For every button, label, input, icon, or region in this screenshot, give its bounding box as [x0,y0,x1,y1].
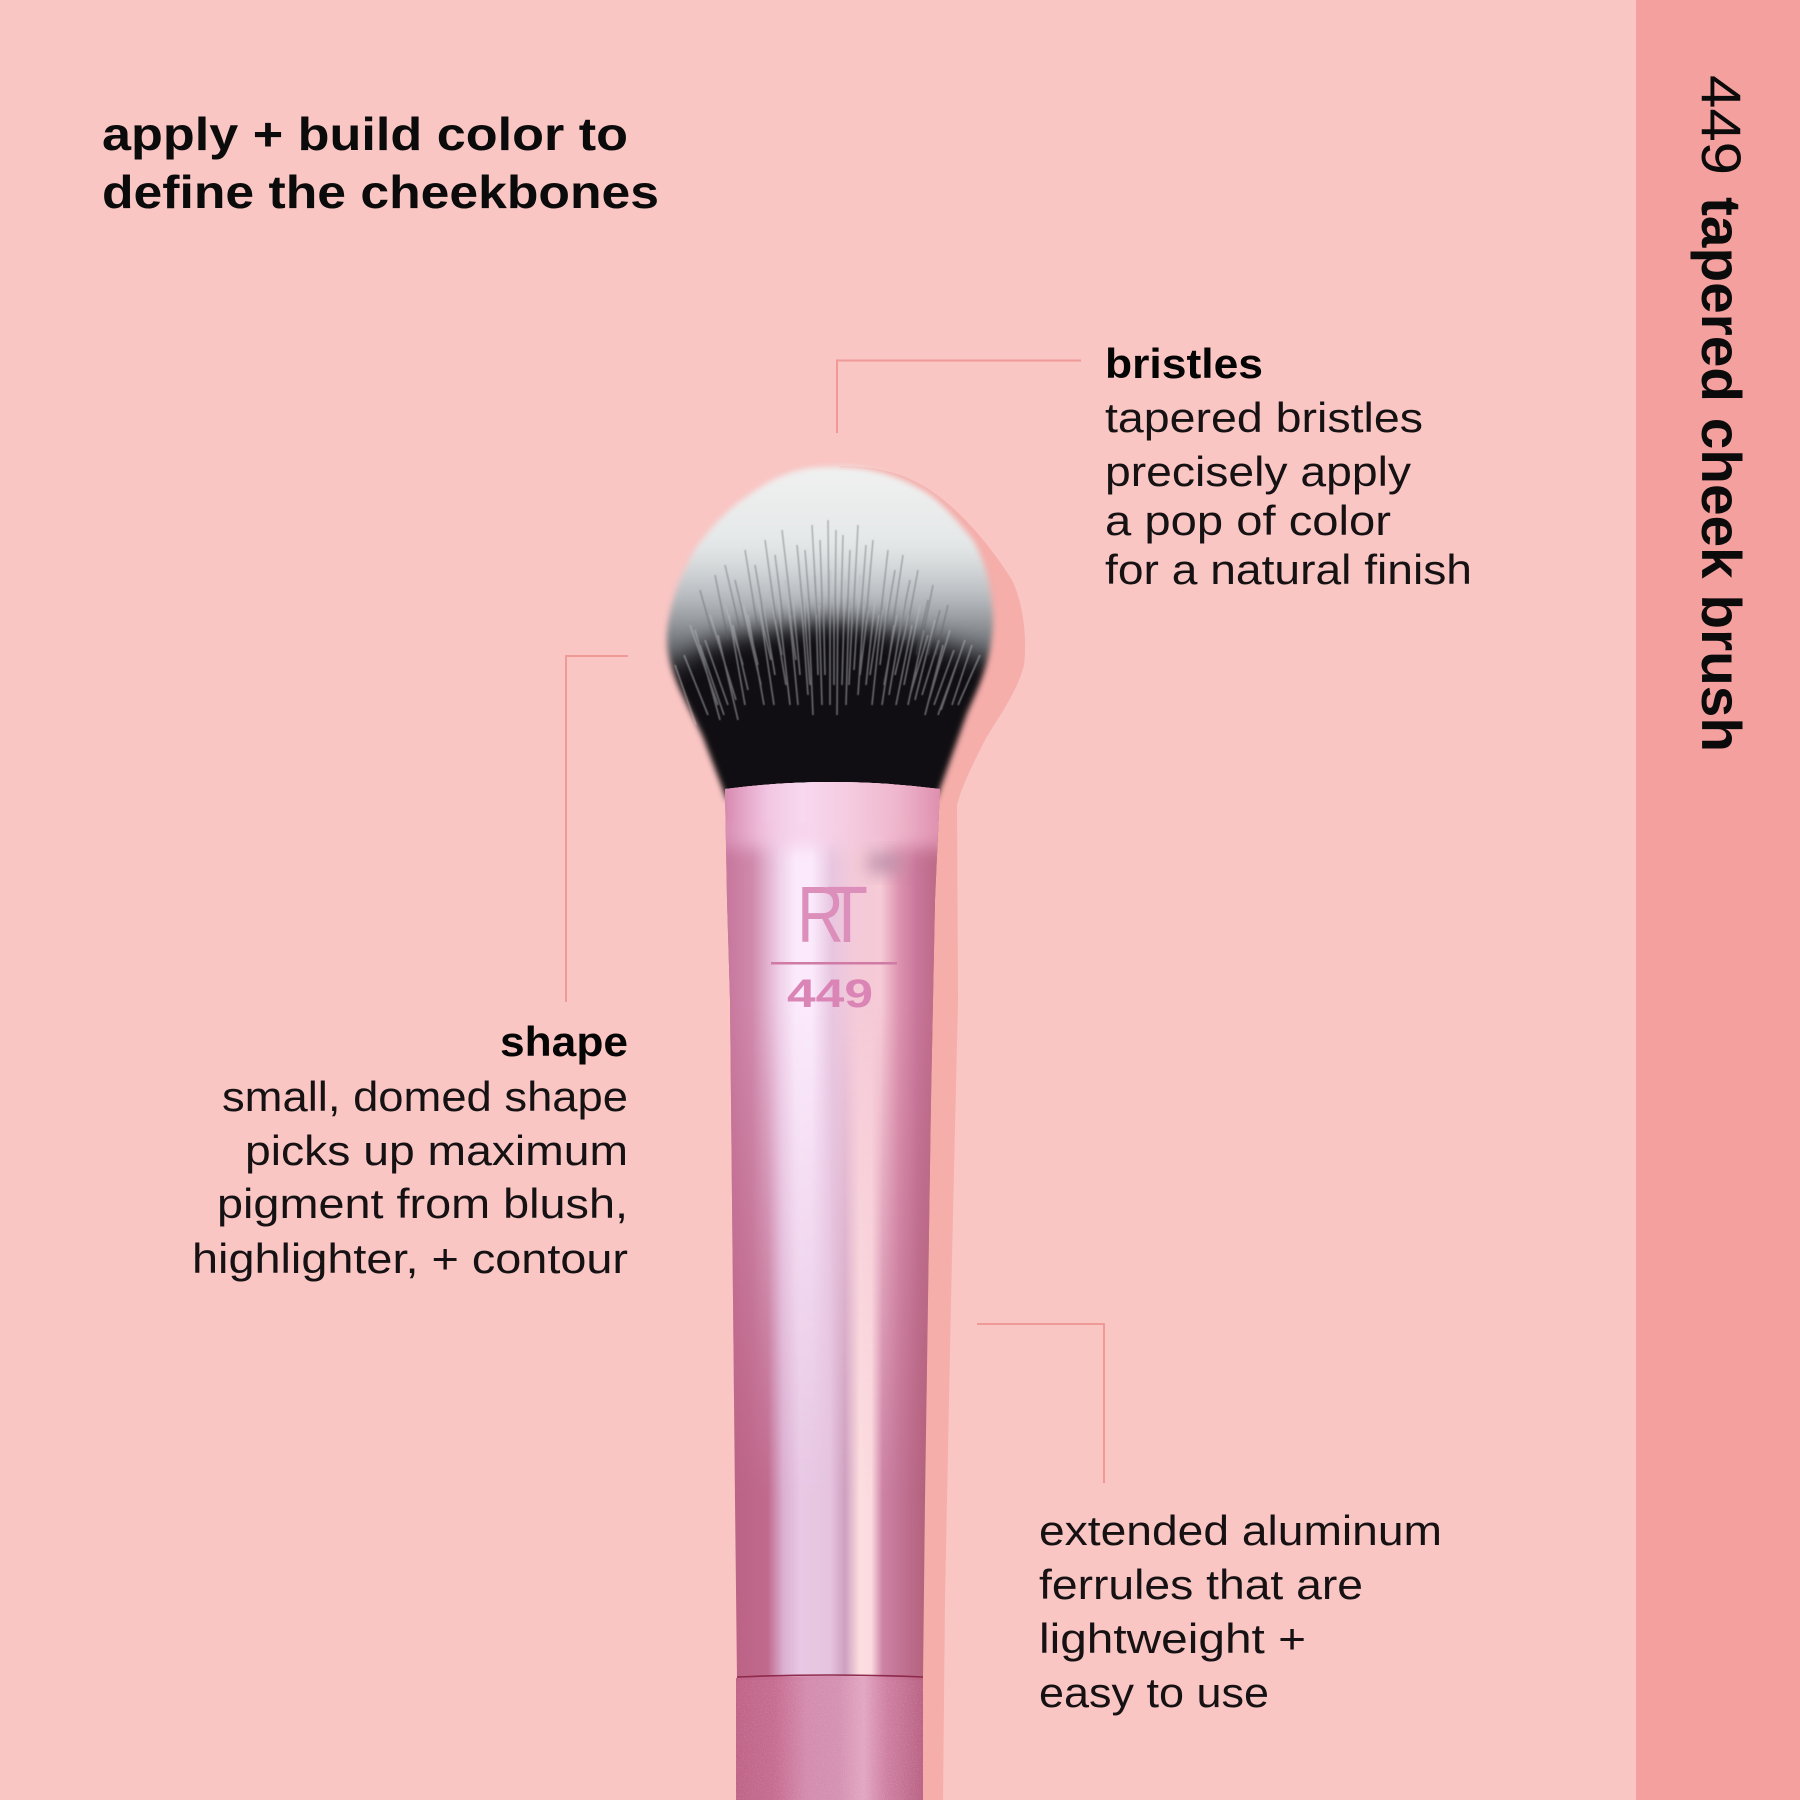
shape text: picks up maximum [245,1127,628,1174]
callout: bristles [837,340,1472,593]
headline: apply + build color to [102,108,628,160]
bristles text: a pop of color [1105,497,1391,544]
ferrule text: easy to use [1039,1669,1269,1716]
callout: aluminum ferrules [977,1324,1442,1716]
ferrule top band [726,782,940,856]
ferrule shaded notch [868,852,902,874]
ferrule text [1039,1507,1442,1716]
connector line [977,1324,1104,1483]
ferrule lower shine [725,782,939,1678]
product title, vertical: 449 [1690,75,1753,175]
ferrule top band solid [726,782,940,796]
shape text: small, domed shape [222,1073,628,1120]
ferrule [725,782,940,1678]
handle metallic grain [736,1680,923,1800]
side panel [1636,0,1800,1800]
shape text: shape [500,1018,628,1065]
bristles text: precisely apply [1105,448,1411,495]
shape text: pigment from blush, [217,1180,628,1227]
connector line [566,656,628,1002]
logo: T [826,870,868,959]
connector line [837,360,1081,433]
headline [102,108,659,218]
bristles text [1105,340,1472,593]
bristles text: bristles [1105,340,1263,387]
ferrule text: extended aluminum [1039,1507,1442,1554]
dark bristle strands [700,520,948,655]
shape text: highlighter, + contour [192,1235,628,1282]
grey bristle strands [675,570,980,725]
logo [771,870,897,1016]
ferrule middle shine [725,782,939,1440]
headline: define the cheekbones [102,166,659,218]
handle body [736,1676,923,1800]
product title, vertical: tapered cheek brush [1690,197,1753,752]
shape text [192,1018,628,1282]
handle [736,1676,923,1800]
ferrule seam [737,1675,923,1677]
ferrule text: ferrules that are [1039,1561,1363,1608]
brush [662,464,997,1800]
brush shadow [800,466,1025,1800]
bristle dark body [666,598,992,803]
bristles text: tapered bristles [1105,394,1423,441]
bristles [662,464,997,803]
ferrule text: lightweight + [1039,1615,1306,1662]
logo: R [797,870,844,959]
bristles text: for a natural finish [1105,546,1472,593]
white bristle tips [663,462,997,677]
logo: 449 [787,972,873,1016]
callout: shape [192,656,628,1282]
